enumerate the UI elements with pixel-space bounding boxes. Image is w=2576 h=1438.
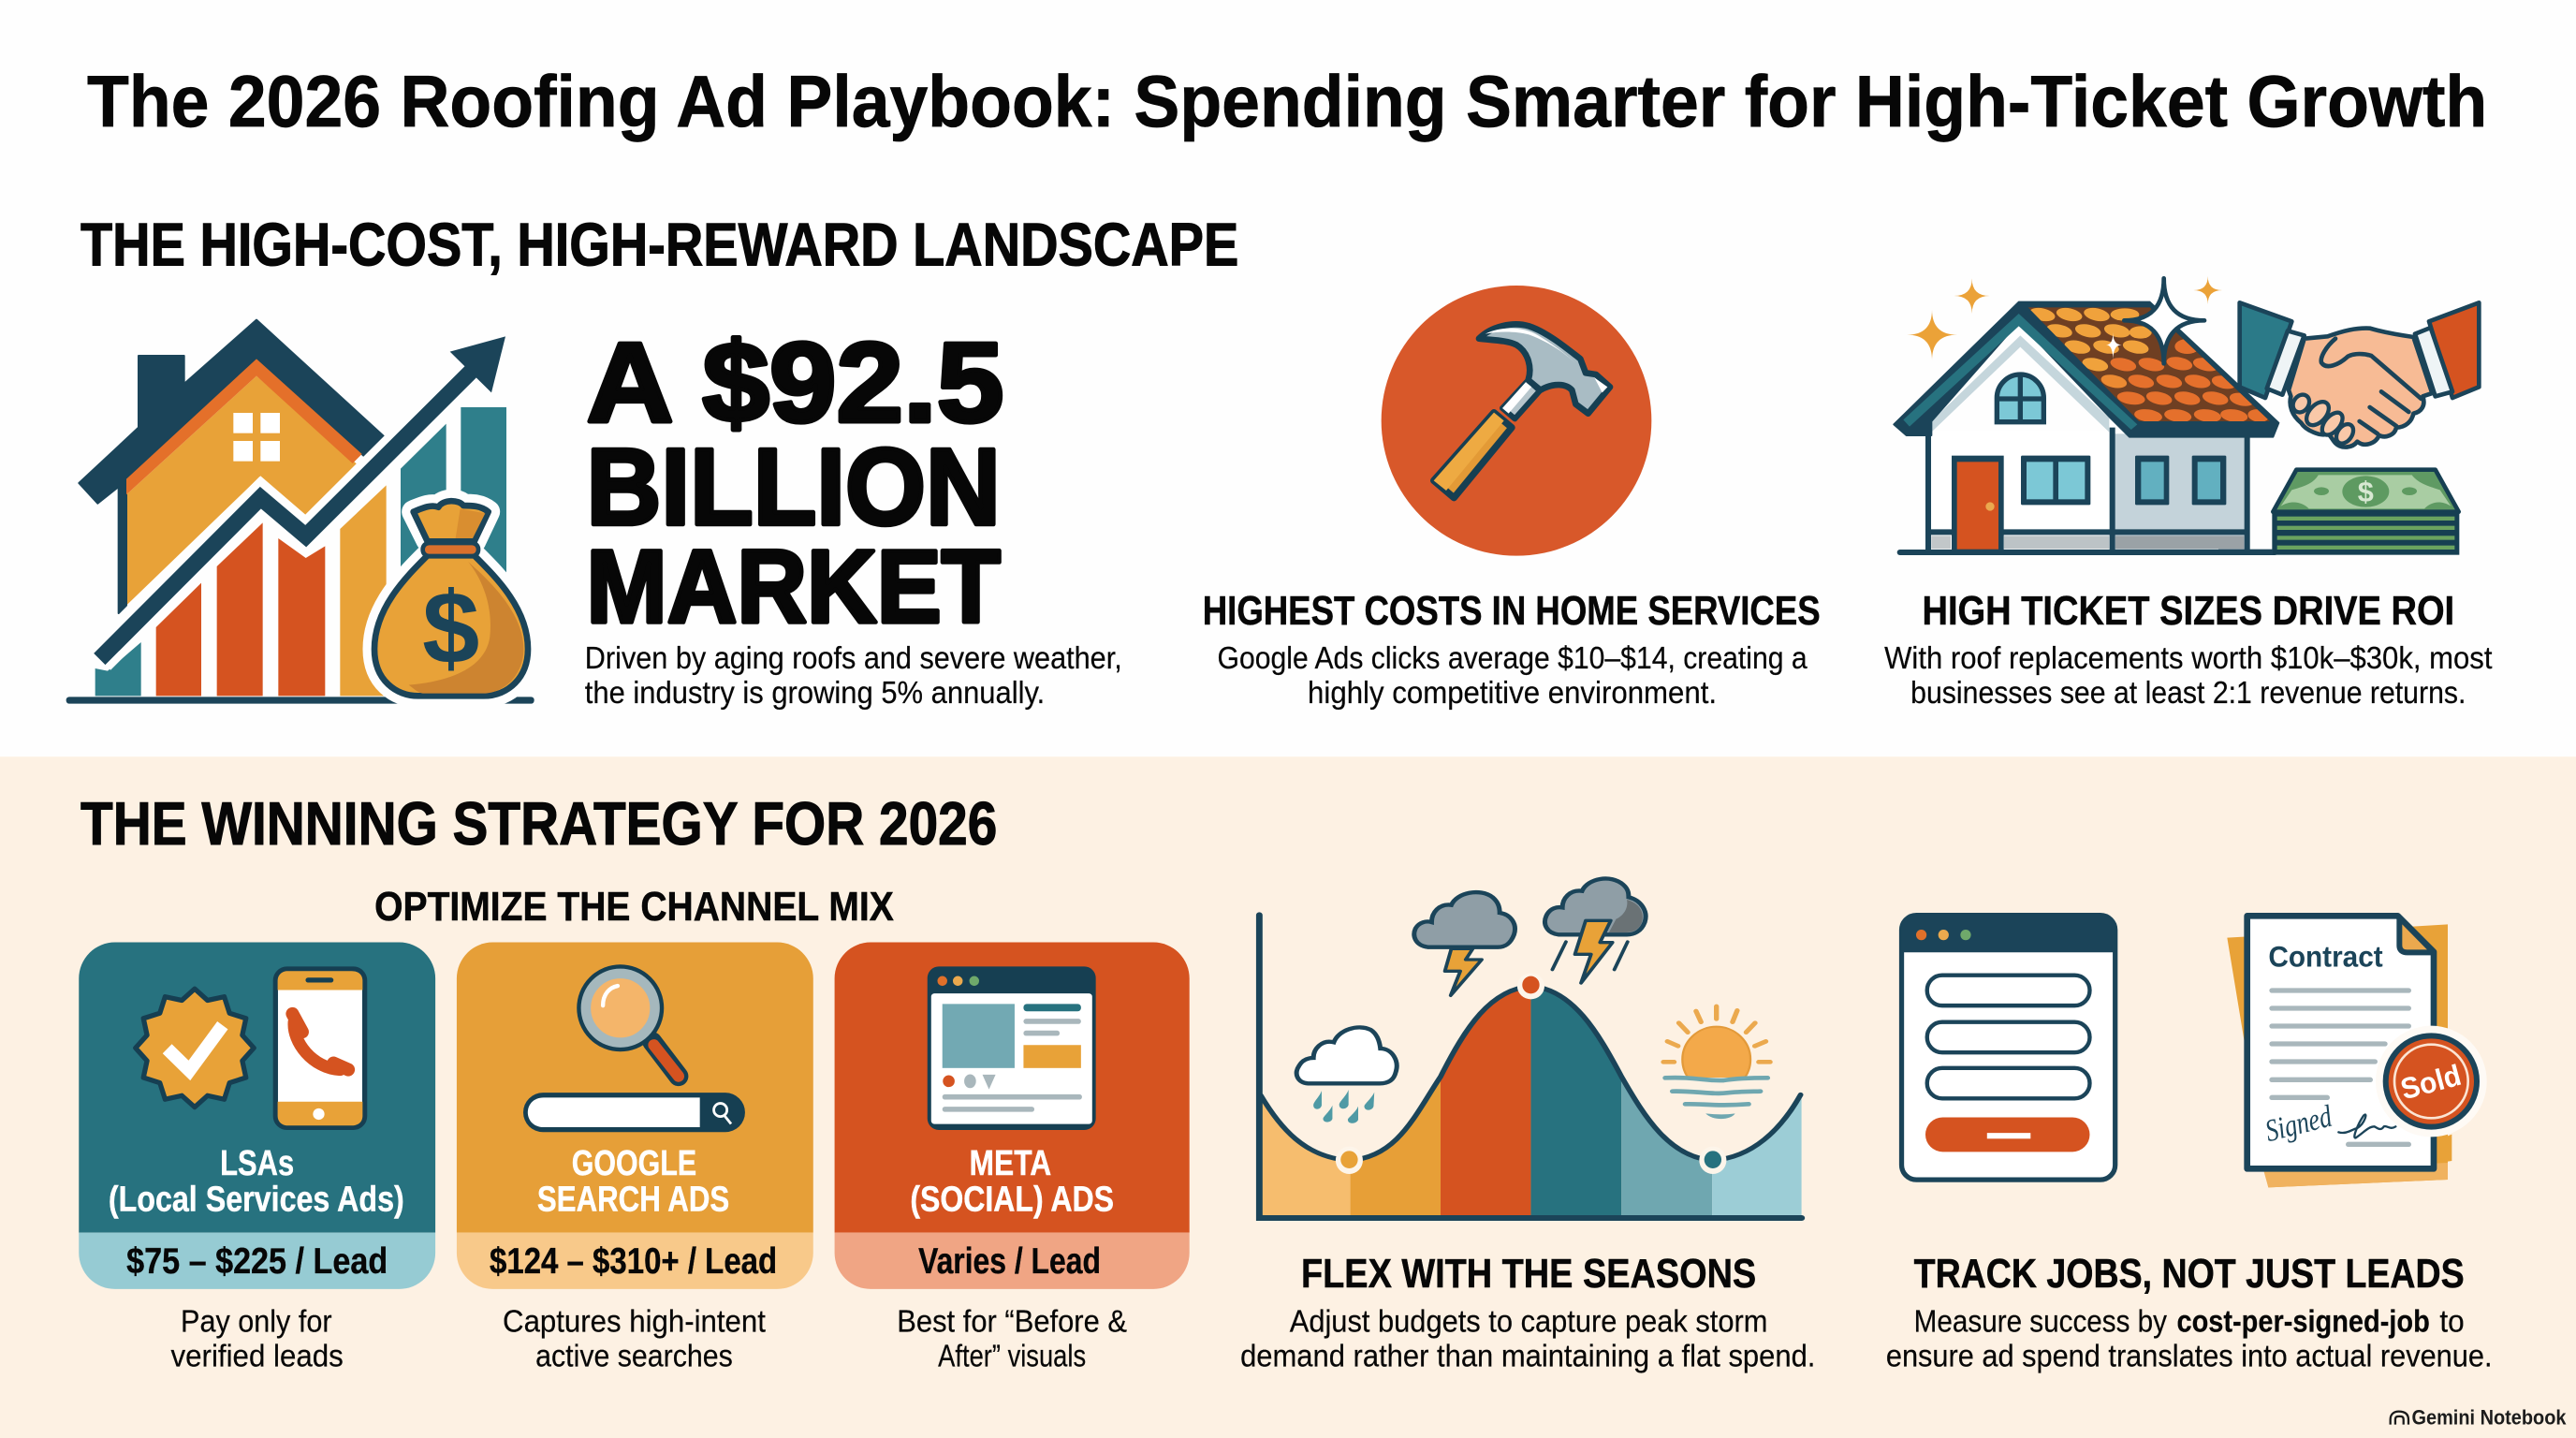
text: Google benefit: Captures high-intent (503, 1305, 767, 1340)
heading: landscape: THE HIGH-COST, HIGH-REWARD LANDSCAPE (80, 211, 1238, 278)
icon: hammer in circle (1382, 286, 1651, 556)
label: LSAs: LSAs (220, 1143, 294, 1182)
icon: signed contract with sold stamp: Contract (2268, 940, 2383, 974)
icon: storm cloud (1414, 892, 1515, 995)
icon: verified badge (136, 989, 254, 1108)
text: Google benefit (503, 1305, 767, 1373)
price: Google: $124 – $310+ / Lead (490, 1241, 777, 1282)
icon: house with growth chart and money bag (66, 320, 534, 704)
icon: stack of cash (2218, 470, 2459, 555)
stat: market size: A $92.5 (587, 318, 1003, 446)
icon: handshake (2240, 302, 2479, 448)
panel: strategy background (0, 756, 2576, 1438)
text: market description: the industry is growing 5% annually. (585, 676, 1045, 711)
text: Meta benefit: Best for “Before & (897, 1305, 1127, 1340)
text: highest costs: highly competitive environment. (1308, 676, 1717, 711)
text: flex with the seasons: Adjust budgets to capture peak storm (1290, 1305, 1767, 1340)
icon: storm cloud with lightning (1545, 878, 1646, 983)
panel: landscape (66, 211, 2493, 711)
text: LSAs benefit: Pay only for (181, 1305, 332, 1340)
stat: market size: MARKET (587, 529, 1001, 644)
heading: strategy: THE WINNING STRATEGY FOR 2026 (80, 790, 997, 858)
text: market description (585, 641, 1122, 711)
icon: house with growth chart and money bag: $ (422, 570, 479, 685)
icon: magnifying glass (579, 967, 679, 1077)
text: Google benefit: active searches (535, 1339, 733, 1373)
text: highest costs: HIGHEST COSTS IN HOME SERVICES (1203, 588, 1821, 634)
text: track jobs: to (2439, 1305, 2465, 1340)
chart: seasonal demand curve (1259, 878, 1802, 1219)
text: flex with the seasons (1240, 1251, 1815, 1373)
roof tiles (2028, 306, 2270, 424)
text: track jobs: cost-per-signed-job (2177, 1305, 2430, 1340)
price: LSAs: $75 – $225 / Lead (126, 1241, 388, 1282)
label: Meta (910, 1143, 1114, 1219)
text: track jobs: ensure ad spend translates into actual revenue. (1886, 1339, 2492, 1373)
stamp: sold: Sold (2397, 1058, 2465, 1106)
panel: winning strategy (79, 790, 2492, 1373)
text: market description: Driven by aging roofs and severe weather, (585, 641, 1122, 676)
label: Google (537, 1143, 729, 1219)
subheading: channel mix: OPTIMIZE THE CHANNEL MIX (374, 884, 894, 930)
label: Meta: META (970, 1143, 1051, 1182)
text: flex with the seasons: FLEX WITH THE SEASONS (1301, 1251, 1756, 1297)
text: track jobs (1886, 1251, 2492, 1373)
title: The 2026 Roofing Ad Playbook: Spending Smarter for High-Ticket Growth (87, 62, 2487, 142)
text: highest costs (1203, 588, 1821, 711)
icon: lead form (1902, 916, 2115, 1180)
card: LSAs (79, 943, 435, 1289)
icon: rain cloud (1296, 1027, 1397, 1123)
text: flex with the seasons: demand rather than maintaining a flat spend. (1240, 1339, 1815, 1373)
signature (2261, 1099, 2395, 1149)
label: Google: GOOGLE (572, 1143, 696, 1182)
icon: social post window (928, 966, 1096, 1130)
text: highest costs: Google Ads clicks average $10–$14, creating a (1218, 641, 1808, 676)
text: track jobs: TRACK JOBS, NOT JUST LEADS (1914, 1251, 2465, 1297)
text: high ticket sizes: HIGH TICKET SIZES DRIVE ROI (1922, 588, 2454, 634)
stat: market size (587, 318, 1003, 644)
stat: market size: BILLION (587, 426, 1001, 548)
card: Google Search Ads (457, 943, 813, 1289)
label: LSAs: (Local Services Ads) (109, 1180, 404, 1219)
icon: house with new roof (1894, 276, 2278, 555)
icon: phone (275, 969, 365, 1127)
label: Meta: (SOCIAL) ADS (910, 1180, 1114, 1219)
icon: signed contract with sold stamp (2227, 916, 2487, 1187)
card: Meta Ads (835, 943, 1190, 1289)
icon: handshake and stack of cash (2218, 302, 2479, 555)
text: Meta benefit: After” visuals (938, 1339, 1086, 1373)
text: LSAs benefit: verified leads (171, 1339, 344, 1373)
stamp: sold (2376, 1026, 2487, 1137)
icon: search bar (523, 1093, 745, 1132)
label: Google: SEARCH ADS (537, 1180, 729, 1219)
text: high ticket sizes: With roof replacements worth $10k–$30k, most (1884, 641, 2493, 676)
text: LSAs benefit (171, 1305, 344, 1373)
icon: stack of cash: $ (2358, 477, 2374, 508)
price: Meta: Varies / Lead (918, 1241, 1101, 1282)
icon: sun over water (1663, 1006, 1770, 1119)
text: track jobs: Measure success by (1914, 1305, 2167, 1340)
label: LSAs (109, 1143, 404, 1219)
text: high ticket sizes (1884, 588, 2493, 711)
text: high ticket sizes: businesses see at least 2:1 revenue returns. (1910, 676, 2466, 711)
signature: Signed (2261, 1099, 2335, 1149)
icon: sparkles (1907, 276, 2222, 360)
text: Meta benefit (897, 1305, 1127, 1373)
